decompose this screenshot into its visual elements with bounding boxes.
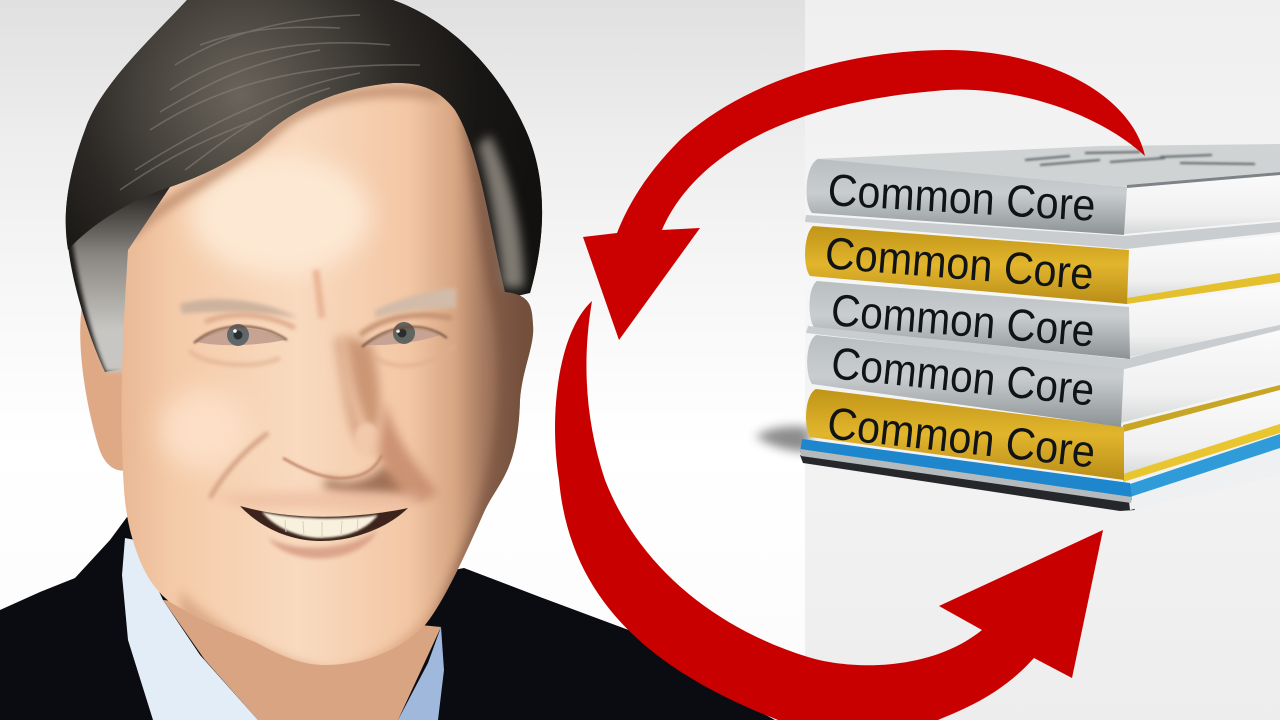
- under-nose shadow: [325, 465, 425, 498]
- plate between books 1 and 2: [805, 215, 1280, 249]
- background: right panel: [805, 0, 1280, 720]
- shirt collar right: [398, 627, 444, 720]
- left brow: [180, 299, 298, 318]
- right brow: [375, 288, 456, 318]
- arrow: bottom, curving right: [555, 301, 1103, 720]
- right gray hair streak: [478, 135, 524, 288]
- mouth: [240, 506, 408, 559]
- nostril wing highlight: [354, 422, 376, 446]
- face: [122, 83, 533, 665]
- smile line: [210, 433, 268, 498]
- left eye: [194, 324, 287, 346]
- tooth gaps: [285, 519, 358, 538]
- stack shadow: [755, 426, 810, 452]
- left cheek highlight: [160, 390, 250, 470]
- teeth: [262, 512, 378, 538]
- eye bags: [189, 350, 421, 368]
- left brow underside: [205, 315, 295, 328]
- lower lip: [268, 530, 378, 559]
- hairline shadow: [130, 91, 440, 235]
- book: gray 1: [806, 144, 1280, 235]
- label: Common Core: [826, 164, 1097, 231]
- book: gray 3: [809, 281, 1280, 359]
- nose right plane shadow: [345, 335, 380, 435]
- background: left panel: [0, 0, 805, 720]
- hair strands: [120, 15, 420, 190]
- chin lower shading: [176, 592, 438, 665]
- facial shading and features: [130, 91, 560, 680]
- label: Common Core: [829, 337, 1097, 416]
- portrait of smiling man: [0, 0, 775, 720]
- plate between books 3 and 4: [806, 320, 1280, 369]
- cheek shadow: [378, 400, 440, 500]
- nostril fold: [283, 455, 382, 478]
- right edge shadow: [430, 120, 534, 617]
- book: gray 4: [807, 326, 1280, 427]
- forehead highlight: [190, 155, 370, 275]
- neck: [163, 600, 441, 720]
- arrow: top, curving left: [583, 50, 1145, 340]
- hair top: [66, 0, 542, 293]
- suit jacket: [0, 517, 775, 720]
- right brow underside: [360, 315, 452, 335]
- book: bottom blue: [800, 434, 1280, 510]
- label: Common Core: [829, 284, 1096, 357]
- upper lip area: [215, 491, 425, 510]
- scribbled cover title: [1025, 152, 1255, 165]
- book: yellow 2: [805, 226, 1280, 304]
- left ear: [80, 305, 135, 471]
- base shadow: [800, 455, 1135, 511]
- shirt collar left: [122, 538, 258, 720]
- hair silhouette back: [66, 0, 542, 372]
- label: Common Core: [825, 397, 1098, 477]
- book: yellow 5: [806, 385, 1280, 482]
- brow furrow: [316, 270, 322, 318]
- book stack: [755, 144, 1280, 511]
- right eye: [362, 322, 447, 347]
- label: Common Core: [823, 227, 1095, 300]
- gray temple hair: [72, 186, 172, 372]
- nose side shadow: [335, 335, 368, 445]
